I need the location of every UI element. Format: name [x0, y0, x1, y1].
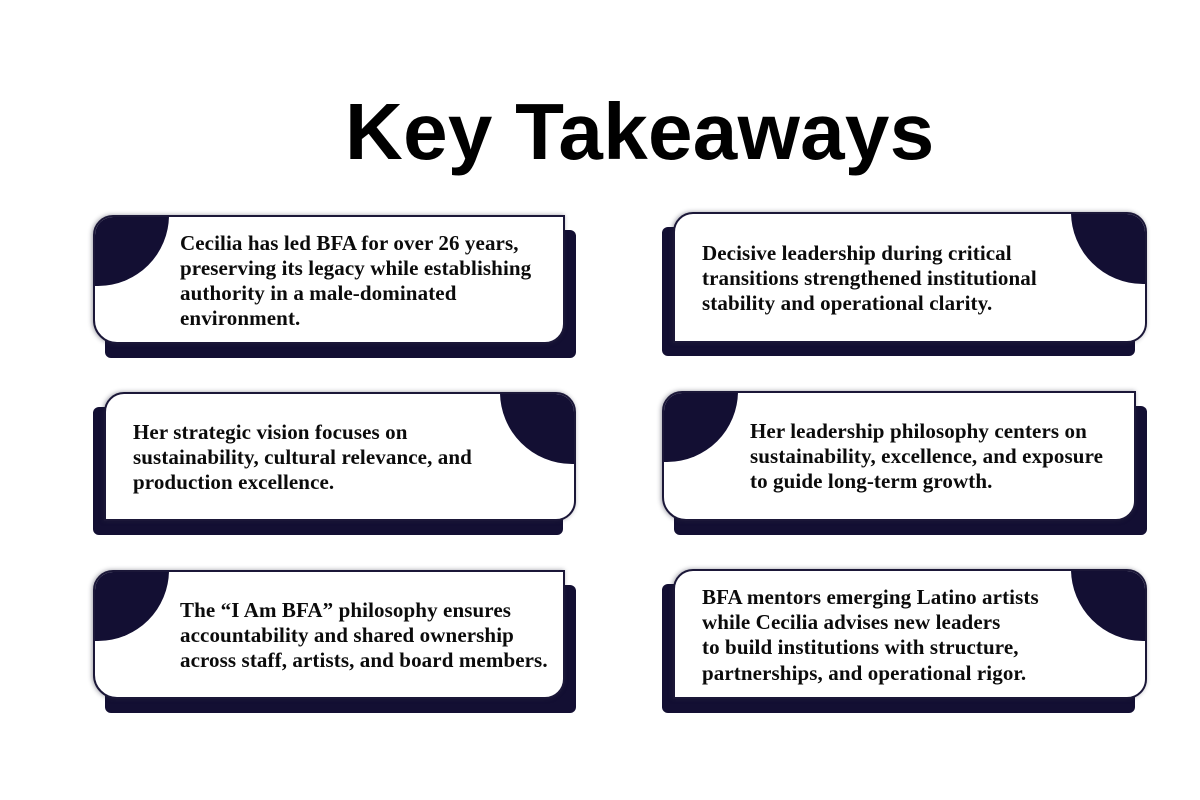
- card text: [133, 420, 472, 494]
- card: strategic vision: [93, 389, 578, 535]
- card: I Am BFA: [89, 567, 576, 713]
- card face: [93, 570, 565, 699]
- card: decisive leadership: [662, 209, 1149, 356]
- card backing shape: [674, 406, 1147, 535]
- corner accent: [1071, 569, 1147, 641]
- corner accent: [93, 215, 169, 286]
- card backing shape: [105, 230, 576, 358]
- card face: [104, 392, 576, 521]
- card backing shape: [662, 227, 1135, 356]
- card text: The “I Am BFA” philosophy ensures: [180, 598, 511, 622]
- card text: transitions strengthened institutional: [702, 266, 1037, 290]
- card text: preserving its legacy while establishing: [180, 256, 531, 280]
- card: mentoring: [662, 566, 1149, 713]
- card text: to guide long-term growth.: [750, 469, 993, 493]
- corner accent: [93, 570, 169, 641]
- card text: [180, 598, 548, 672]
- card text: Her strategic vision focuses on: [133, 420, 408, 444]
- corner accent: [662, 391, 738, 462]
- corner accent: [500, 392, 576, 464]
- card text: BFA mentors emerging Latino artists: [702, 585, 1039, 609]
- card text: while Cecilia advises new leaders: [702, 610, 1000, 634]
- card text: sustainability, excellence, and exposure: [750, 444, 1103, 468]
- card text: authority in a male-dominated: [180, 281, 456, 305]
- card face: [662, 391, 1136, 521]
- card text: Decisive leadership during critical: [702, 241, 1012, 265]
- card text: stability and operational clarity.: [702, 291, 992, 315]
- card text: to build institutions with structure,: [702, 635, 1019, 659]
- card text: production excellence.: [133, 470, 334, 494]
- card text: sustainability, cultural relevance, and: [133, 445, 472, 469]
- card backing shape: [93, 407, 563, 535]
- card text: [702, 241, 1037, 315]
- card text: across staff, artists, and board members.: [180, 648, 548, 672]
- card text: partnerships, and operational rigor.: [702, 661, 1026, 685]
- corner accent: [1071, 212, 1147, 284]
- card: Cecilia's tenure: [89, 212, 576, 358]
- title: Key Takeaways: [345, 87, 934, 176]
- card text: environment.: [180, 306, 300, 330]
- card text: accountability and shared ownership: [180, 623, 514, 647]
- card face: [673, 569, 1147, 699]
- card text: [180, 230, 531, 330]
- card text: Cecilia has led BFA for over 26 years,: [180, 230, 519, 254]
- card text: [702, 585, 1039, 685]
- card: leadership philosophy: [658, 388, 1147, 535]
- card text: [750, 419, 1103, 493]
- card backing shape: [662, 584, 1135, 713]
- card backing shape: [105, 585, 576, 713]
- card text: Her leadership philosophy centers on: [750, 419, 1087, 443]
- card face: [93, 215, 565, 344]
- card face: [673, 212, 1147, 343]
